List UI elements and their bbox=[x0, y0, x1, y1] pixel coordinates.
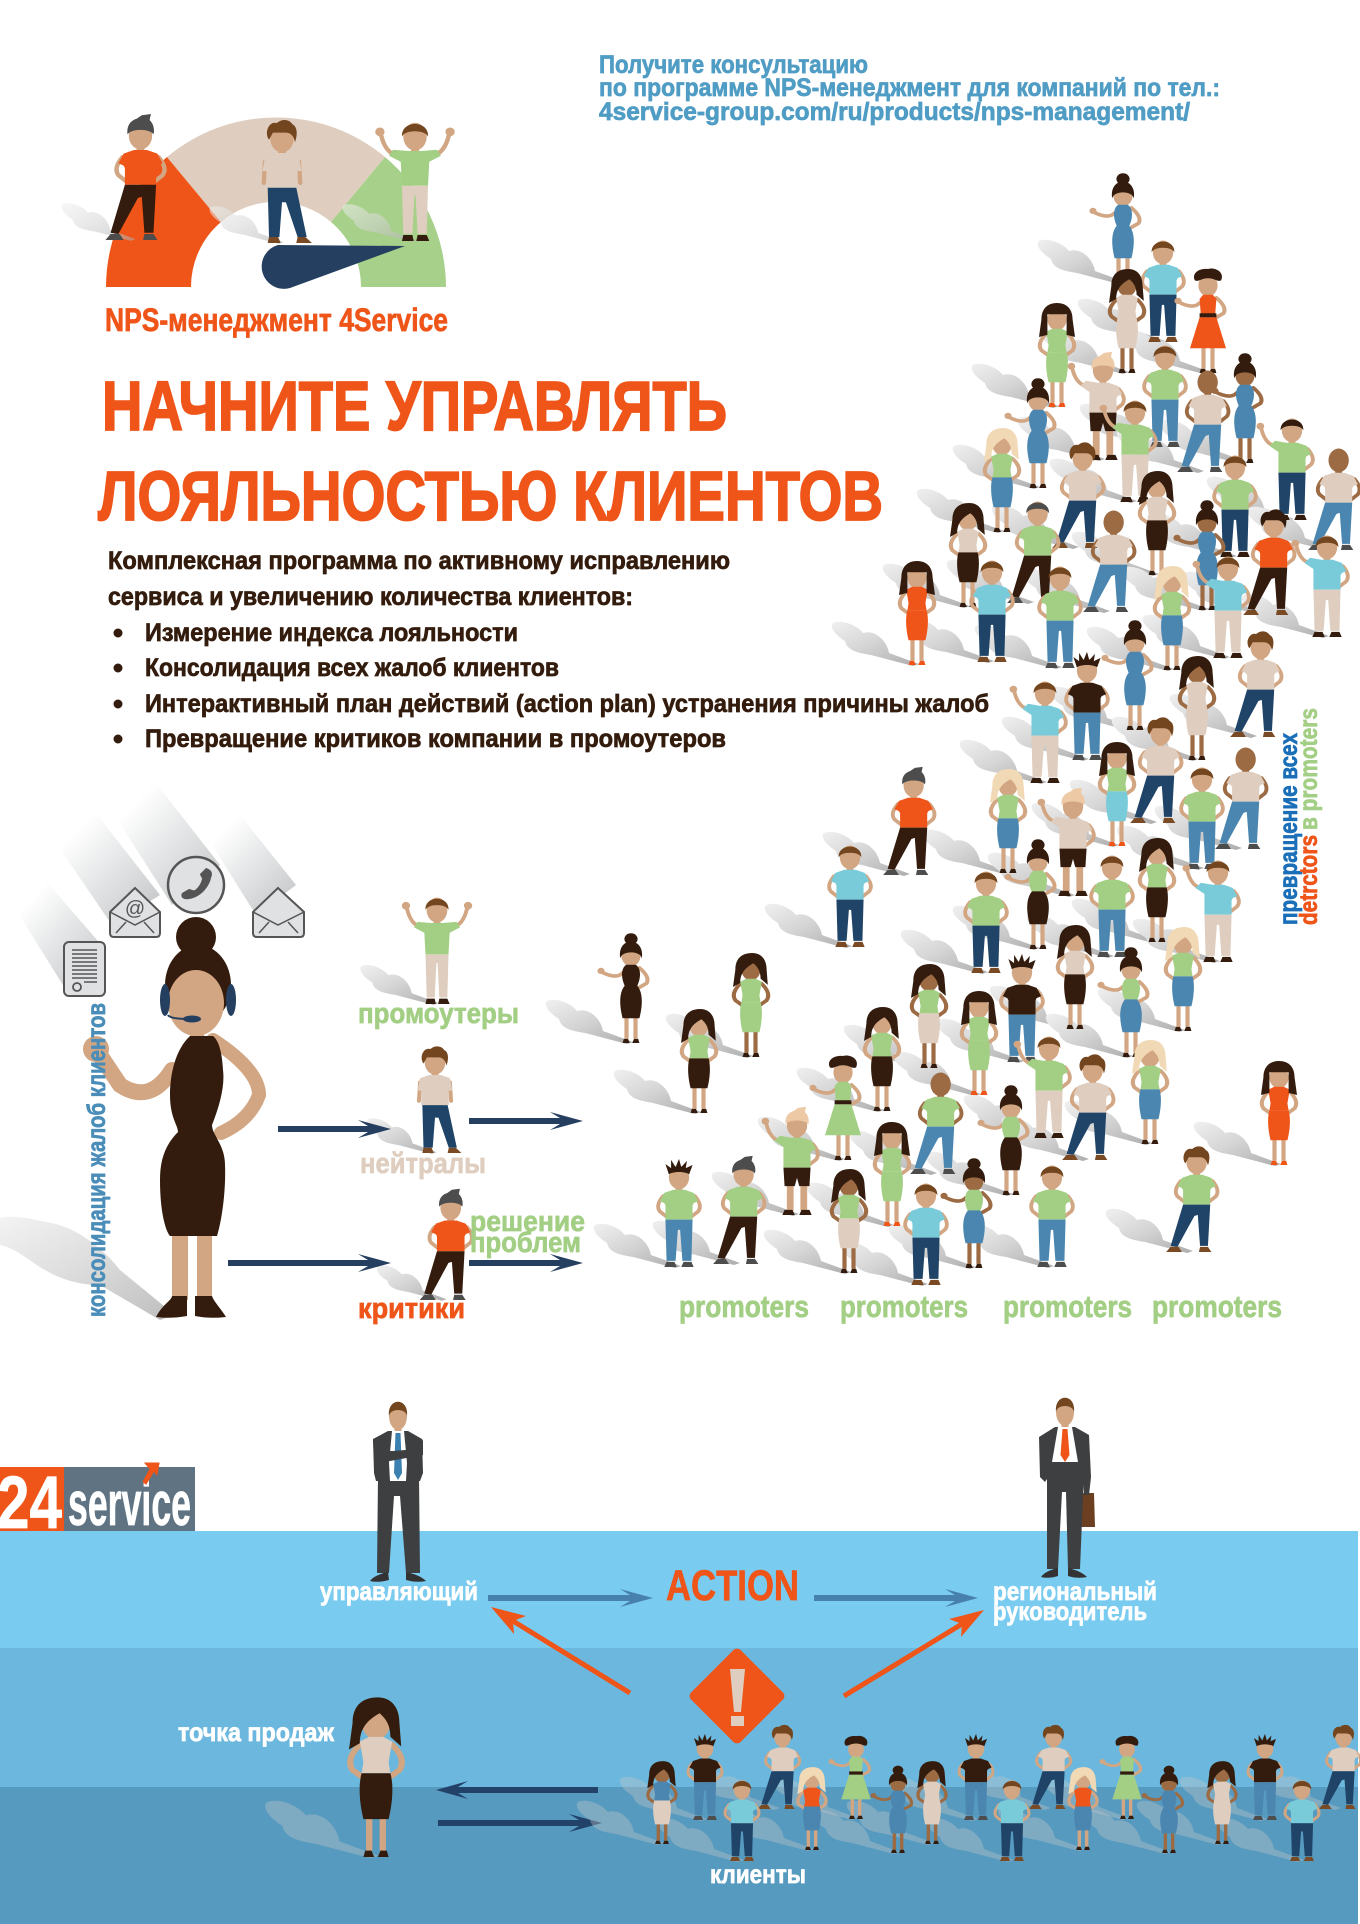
person: man in green bbox=[713, 1156, 765, 1264]
icon: phone bbox=[168, 857, 224, 913]
vertical label: conversion: превращение всех bbox=[1275, 733, 1303, 925]
icon: document bbox=[64, 942, 105, 996]
promoter figure bbox=[375, 123, 455, 241]
person: man waving in shorts bbox=[762, 1107, 818, 1215]
arrow: neutrals to promoters bbox=[469, 1112, 583, 1130]
client bbox=[1207, 1761, 1236, 1844]
person: man in red bbox=[1243, 509, 1295, 615]
person: woman green and blue bbox=[1097, 947, 1148, 1057]
client bbox=[917, 1761, 946, 1844]
client bbox=[758, 1725, 800, 1809]
label: regional director: руководитель bbox=[993, 1596, 1147, 1626]
person: man in green bbox=[1144, 346, 1186, 447]
critic figure bbox=[105, 114, 164, 240]
arrow: point of sale to clients bbox=[438, 1814, 602, 1832]
person: man in cyan bbox=[905, 1184, 947, 1285]
person: woman green dress bbox=[733, 953, 768, 1057]
label: point of sale: точка продаж bbox=[178, 1717, 334, 1747]
person: man in green bbox=[1181, 768, 1223, 869]
alert diamond bbox=[688, 1647, 786, 1745]
logo 4service: service bbox=[68, 1470, 191, 1539]
arrow: operator to critics bbox=[228, 1254, 391, 1272]
contact text: Получите консультацию bbox=[599, 51, 868, 79]
person: man in beige bbox=[1230, 631, 1282, 737]
person: blonde woman bbox=[984, 428, 1019, 532]
person: man in beige bbox=[1215, 748, 1267, 849]
person: man in green bbox=[910, 1073, 962, 1174]
person: woman green and black bbox=[1139, 838, 1174, 942]
person: blonde woman bbox=[1132, 1040, 1167, 1144]
label: regional director: региональный bbox=[993, 1576, 1157, 1606]
person: man waving in green bbox=[1257, 419, 1313, 520]
arrow: action to regional director bbox=[814, 1589, 978, 1607]
person: woman green and black bbox=[864, 1007, 899, 1111]
client bbox=[871, 1766, 911, 1853]
person: man in beige bbox=[1130, 717, 1182, 823]
manager figure bbox=[370, 1402, 426, 1582]
promoters labels: promoters bbox=[840, 1289, 968, 1324]
person: man in black bbox=[1066, 652, 1108, 760]
person: woman in blue bbox=[1004, 378, 1054, 488]
person: man waving in green bbox=[1014, 1037, 1070, 1138]
crowd of people turning into promoters bbox=[597, 173, 1360, 1285]
person: woman in blue bbox=[1211, 353, 1262, 463]
regional director figure bbox=[1039, 1398, 1095, 1578]
person: woman green dress bbox=[961, 991, 997, 1095]
gauge logo bbox=[62, 114, 455, 289]
program description: Превращение критиков компании в промоутеров bbox=[145, 725, 726, 753]
client bbox=[1029, 1725, 1071, 1809]
contact text bbox=[599, 51, 1220, 126]
person: man in green bbox=[1007, 502, 1059, 603]
person: man waving in cyan bbox=[1010, 682, 1066, 783]
person: woman in blue bbox=[1089, 173, 1140, 283]
client bbox=[647, 1761, 676, 1844]
contact text: по программе NPS-менеджмент для компаний по тел.: bbox=[599, 74, 1220, 102]
person: woman green and black bbox=[1004, 839, 1054, 949]
vertical label: complaints consolidation: консолидация жалоб клиентов bbox=[83, 1003, 111, 1317]
person: blonde woman bbox=[990, 769, 1025, 873]
person: man waving in cyan bbox=[1183, 861, 1239, 962]
icon: email at sign: @ bbox=[125, 898, 145, 920]
arrow: alert to regional director bbox=[844, 1610, 984, 1696]
person: blonde woman bbox=[1165, 927, 1200, 1031]
label: promoters: промоутеры bbox=[358, 998, 519, 1030]
person: man waving in shorts bbox=[1038, 788, 1094, 896]
promoters labels: promoters bbox=[1152, 1289, 1282, 1324]
person: man in green bbox=[658, 1159, 700, 1267]
main heading: НАЧНИТЕ УПРАВЛЯТЬ bbox=[102, 367, 727, 445]
person: man in cyan bbox=[971, 561, 1013, 662]
person: woman in green bbox=[1039, 303, 1075, 407]
client bbox=[1100, 1736, 1142, 1819]
operator woman with headset bbox=[83, 917, 259, 1318]
promoters labels bbox=[679, 1289, 1282, 1324]
client bbox=[1248, 1734, 1282, 1820]
arrow: clients to point of sale bbox=[436, 1781, 598, 1799]
person: man in red, critic bbox=[883, 767, 935, 875]
critic figure bbox=[420, 1189, 472, 1300]
label: clients: клиенты bbox=[710, 1859, 806, 1889]
label: regional director bbox=[993, 1576, 1157, 1626]
person: man in black bbox=[1001, 954, 1043, 1062]
person: man in green bbox=[1166, 1146, 1218, 1252]
client bbox=[1285, 1780, 1319, 1861]
person: man in green bbox=[1031, 1166, 1073, 1267]
client bbox=[1319, 1725, 1360, 1809]
icon: envelope bbox=[253, 888, 304, 937]
client bbox=[725, 1780, 759, 1861]
neutral figure bbox=[262, 120, 312, 243]
person: woman green and black bbox=[681, 1009, 716, 1113]
vertical label: conversion bbox=[1275, 708, 1323, 925]
person: woman in beige top bbox=[1139, 471, 1174, 575]
arrow: manager to action bbox=[488, 1589, 653, 1607]
person: woman in red bbox=[1261, 1061, 1297, 1165]
arrow: critics to promoters bbox=[469, 1254, 583, 1272]
arrow: operator to neutrals bbox=[278, 1120, 391, 1138]
person: woman green dress bbox=[874, 1122, 910, 1226]
water bands bbox=[0, 1531, 1358, 1924]
person: blonde woman bbox=[1154, 566, 1189, 670]
client bbox=[688, 1734, 722, 1820]
person: woman green and beige bbox=[911, 964, 946, 1068]
person: man in beige bbox=[1083, 511, 1135, 612]
label: problem solving: решение bbox=[470, 1206, 585, 1238]
person: man waving in cyan bbox=[1193, 557, 1249, 658]
person: man in green bbox=[1214, 456, 1256, 557]
program description bbox=[108, 547, 989, 753]
person: man in beige bbox=[1052, 442, 1104, 548]
person: woman in blue bbox=[1173, 500, 1224, 610]
person: man in cyan bbox=[1142, 241, 1184, 342]
person: woman green and black bbox=[977, 1085, 1028, 1195]
promoters labels: promoters bbox=[679, 1289, 809, 1324]
client bbox=[829, 1736, 871, 1819]
person: man in beige bbox=[1308, 449, 1360, 550]
person: man in green bbox=[1091, 856, 1133, 957]
main heading: ЛОЯЛЬНОСТЬЮ КЛИЕНТОВ bbox=[98, 457, 883, 535]
label: problem solving: проблем bbox=[470, 1227, 581, 1259]
label: neutrals: нейтралы bbox=[360, 1148, 486, 1180]
person: man in cyan bbox=[829, 846, 871, 947]
shop assistant woman bbox=[349, 1697, 402, 1857]
neutral figure bbox=[418, 1046, 461, 1153]
main heading bbox=[98, 367, 883, 535]
program description: Измерение индекса лояльности bbox=[145, 619, 518, 647]
label: problem solving bbox=[470, 1206, 585, 1259]
person: woman in beige dress bbox=[1179, 656, 1214, 760]
client bbox=[1142, 1766, 1182, 1853]
person: woman beige and black bbox=[1057, 925, 1092, 1029]
person: man in beige bbox=[1062, 1054, 1114, 1160]
person: man in green bbox=[965, 872, 1007, 973]
person: man waving in shorts bbox=[1068, 352, 1124, 460]
client bbox=[1068, 1767, 1097, 1850]
person: woman in red bbox=[899, 561, 935, 665]
gauge caption: NPS-менеджмент 4Service bbox=[105, 302, 448, 338]
label: action: ACTION bbox=[666, 1562, 799, 1610]
person: woman green and blue bbox=[940, 1158, 990, 1268]
arrow: alert to manager bbox=[491, 1607, 630, 1693]
label: critics: критики bbox=[358, 1293, 465, 1325]
person: man in green bbox=[1039, 567, 1081, 668]
client bbox=[797, 1767, 826, 1850]
client bbox=[959, 1734, 993, 1820]
vertical label: conversion: detrctors bbox=[1295, 835, 1323, 925]
person: man waving in green bbox=[1100, 401, 1156, 502]
promoters labels: promoters bbox=[1003, 1289, 1132, 1324]
icon: email at sign bbox=[110, 888, 160, 937]
person: woman in beige top bbox=[950, 503, 985, 607]
program description: Консолидация всех жалоб клиентов bbox=[145, 654, 559, 682]
person: woman in beige bbox=[1109, 269, 1144, 373]
program description: Комплексная программа по активному исправлению bbox=[108, 547, 730, 575]
contact text: 4service-group.com/ru/products/nps-management/ bbox=[599, 98, 1190, 126]
program description: Интерактивный план действий (action plan) устранения причины жалоб bbox=[145, 690, 989, 718]
needle bbox=[262, 245, 405, 289]
person: woman in red dress bbox=[1174, 269, 1226, 373]
vertical label: conversion: в promoters bbox=[1295, 708, 1323, 830]
program description: сервиса и увеличению количества клиентов: bbox=[108, 583, 633, 611]
person: man waving in cyan bbox=[1292, 536, 1348, 637]
person: woman green and beige bbox=[831, 1169, 866, 1273]
promoter figure bbox=[402, 898, 472, 1004]
person: woman green and cyan bbox=[1099, 742, 1135, 846]
person: woman black dress bbox=[597, 933, 648, 1043]
clients crowd bbox=[647, 1725, 1360, 1861]
label: manager: управляющий bbox=[320, 1576, 478, 1606]
logo 4service bbox=[0, 1461, 195, 1544]
person: man in beige bbox=[1177, 371, 1229, 472]
client bbox=[995, 1780, 1029, 1861]
person: woman in blue bbox=[1101, 620, 1152, 730]
person: woman flared green dress bbox=[809, 1056, 861, 1160]
